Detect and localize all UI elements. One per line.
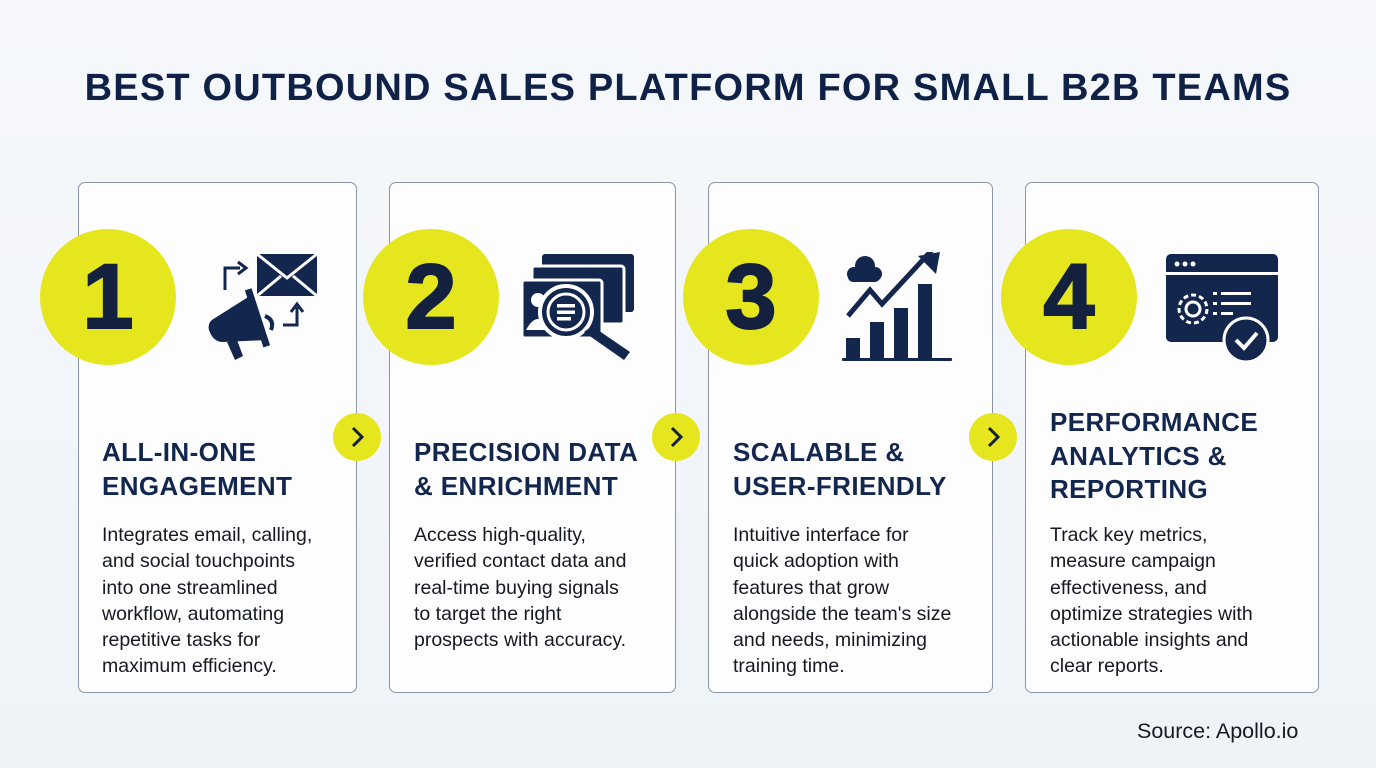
heading 4 (1050, 407, 1258, 504)
number badge 2: 2 (405, 246, 457, 348)
body 1: and social touchpoints (102, 550, 295, 572)
heading 3 (733, 437, 947, 500)
heading 4: REPORTING (1050, 474, 1208, 504)
source: Source: Apollo.io (1137, 719, 1298, 743)
body 3: Intuitive interface for (733, 524, 909, 546)
number badge 4 (1001, 229, 1137, 365)
icon: megaphone with email (208, 254, 317, 360)
body 2: prospects with accuracy. (414, 629, 626, 651)
body 4: effectiveness, and (1050, 577, 1207, 599)
icon: growth chart with cloud (842, 252, 952, 361)
body 3: quick adoption with (733, 550, 899, 572)
number badge 3 (683, 229, 819, 365)
number badge 3: 3 (725, 246, 777, 348)
number badge 2 (363, 229, 499, 365)
body 1: repetitive tasks for (102, 629, 260, 651)
title: BEST OUTBOUND SALES PLATFORM FOR SMALL B2B TEAMS (85, 67, 1291, 109)
icon: browser settings with check (1166, 254, 1278, 360)
body 3: and needs, minimizing (733, 629, 927, 651)
icon: data cards with magnifier (524, 254, 634, 360)
body 2: to target the right (414, 603, 561, 625)
body 3 (733, 524, 951, 677)
number badge 1 (40, 229, 176, 365)
body 4: measure campaign (1050, 550, 1216, 572)
body 2: real-time buying signals (414, 577, 619, 599)
body 4: actionable insights and (1050, 629, 1248, 651)
body 4 (1050, 524, 1253, 677)
heading 4: PERFORMANCE (1050, 407, 1258, 437)
heading 2: PRECISION DATA (414, 437, 638, 467)
body 1: maximum efficiency. (102, 655, 277, 677)
body 1: Integrates email, calling, (102, 524, 312, 546)
heading 3: USER-FRIENDLY (733, 470, 947, 500)
heading 2: & ENRICHMENT (414, 470, 618, 500)
heading 1: ENGAGEMENT (102, 470, 292, 500)
number badge 1: 1 (82, 246, 134, 348)
heading 4: ANALYTICS & (1050, 440, 1227, 470)
body 3: training time. (733, 655, 845, 677)
body 2 (414, 524, 626, 651)
body 2: Access high-quality, (414, 524, 586, 546)
body 3: alongside the team's size (733, 603, 951, 625)
heading 3: SCALABLE & (733, 437, 905, 467)
arrow 1 (333, 413, 381, 461)
body 2: verified contact data and (414, 550, 626, 572)
body 1: into one streamlined (102, 577, 278, 599)
body 3: features that grow (733, 577, 889, 599)
body 4: Track key metrics, (1050, 524, 1207, 546)
heading 1 (102, 437, 292, 500)
arrow 3 (969, 413, 1017, 461)
arrow 2 (652, 413, 700, 461)
panel: card 2 (389, 182, 676, 693)
heading 1: ALL-IN-ONE (102, 437, 256, 467)
body 1 (102, 524, 312, 677)
panel: card 3 (708, 182, 993, 693)
body 1: workflow, automating (102, 603, 284, 625)
heading 2 (414, 437, 638, 500)
panel: card 4 (1025, 182, 1319, 693)
panel: card 1 (78, 182, 357, 693)
body 4: optimize strategies with (1050, 603, 1253, 625)
body 4: clear reports. (1050, 655, 1164, 677)
number badge 4: 4 (1043, 246, 1095, 348)
